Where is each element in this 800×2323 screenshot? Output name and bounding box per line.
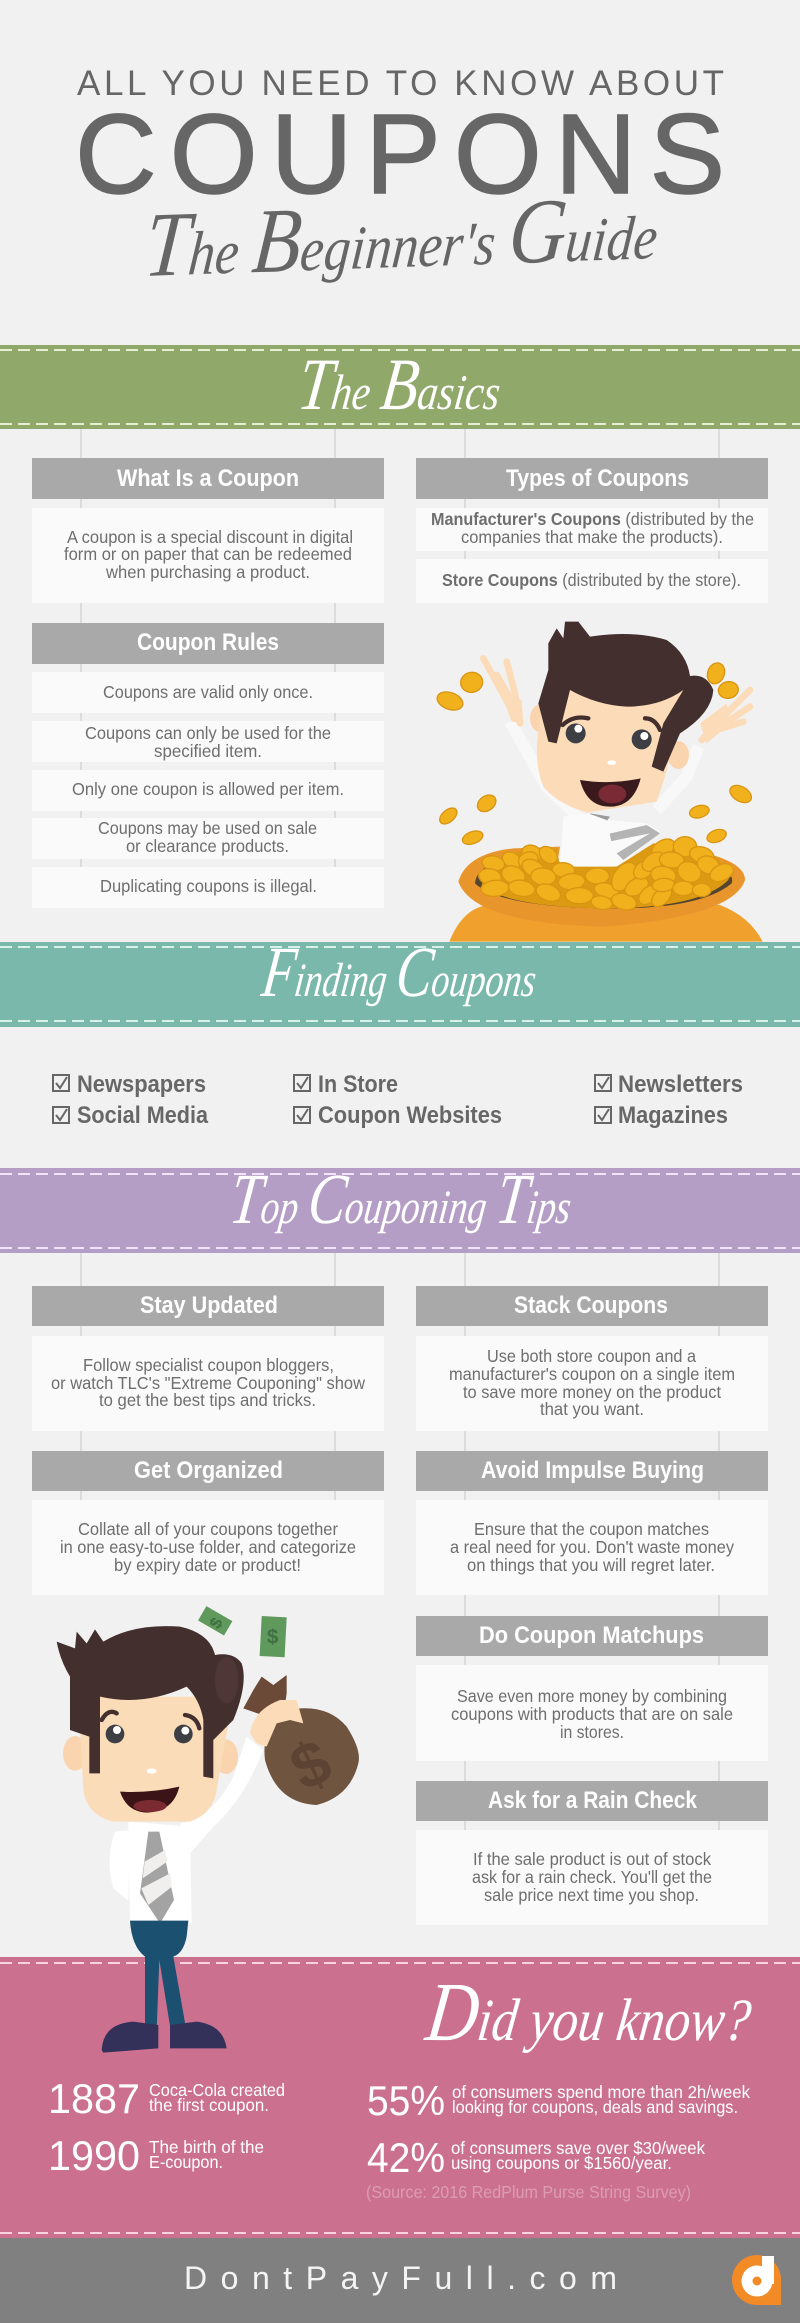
panel: get organized: Collate all of your coupons together	[78, 1519, 338, 1539]
panel: ask for a rain check: Ask for a Rain Check	[488, 1787, 698, 1814]
panel: do coupon matchups: in stores.	[560, 1722, 624, 1742]
stat: 55%: looking for coupons, deals and savings.	[452, 2097, 738, 2117]
panel: coupon rules: Coupons can only be used for the	[85, 723, 331, 743]
panel: coupon rules: or clearance products.	[126, 836, 289, 856]
source note: (Source: 2016 RedPlum Purse String Survey)	[366, 2182, 691, 2202]
panel: get organized	[32, 1451, 384, 1595]
stat: 1990: E-coupon.	[149, 2152, 223, 2172]
stat: 1990: 1990	[48, 2132, 140, 2179]
panel: get organized: in one easy-to-use folder, and categorize	[60, 1537, 356, 1557]
stat: 1887	[48, 2075, 285, 2122]
panel: types of coupons: Types of Coupons	[506, 465, 689, 492]
panel: ask for a rain check: If the sale product is out of stock	[473, 1849, 711, 1869]
banner: finding coupons: Finding Coupons	[257, 932, 542, 1012]
banner: top couponing tips: Top Couponing Tips	[226, 1159, 577, 1239]
panel: coupon rules: Coupons may be used on sale	[98, 818, 317, 838]
banner: the basics: The Basics	[294, 344, 506, 426]
panel: avoid impulse buying: Avoid Impulse Buying	[481, 1457, 704, 1484]
stat: 42%	[367, 2134, 705, 2181]
panel: stack coupons: Stack Coupons	[514, 1292, 668, 1319]
banner: top couponing tips	[0, 1159, 800, 1253]
panel: avoid impulse buying: a real need for you. Don't waste money	[450, 1537, 734, 1557]
panel: stack coupons: to save more money on the product	[463, 1382, 721, 1402]
icon: dontpayfull logo	[732, 2255, 781, 2305]
checklist: where to find coupons: Newspapers	[77, 1071, 206, 1098]
stat: 1990: The birth of the	[149, 2137, 264, 2157]
checklist: where to find coupons: Social Media	[77, 1102, 209, 1129]
illustration: man holding money bag: $	[280, 1726, 342, 1805]
panel: did you know	[0, 1957, 800, 2238]
checklist: where to find coupons	[53, 1071, 743, 1129]
title: The Beginner's Guide	[141, 176, 663, 296]
checklist: where to find coupons: Coupon Websites	[318, 1102, 502, 1129]
panel: stay updated: Follow specialist coupon bloggers,	[83, 1355, 334, 1375]
panel: stack coupons: manufacturer's coupon on a single item	[449, 1364, 735, 1384]
footer: DontPayFull.com	[184, 2260, 617, 2296]
panel: avoid impulse buying	[416, 1451, 768, 1595]
panel: stay updated: or watch TLC's "Extreme Couponing" show	[51, 1373, 365, 1393]
stat: 42%: 42%	[367, 2134, 445, 2181]
panel: types of coupons: Manufacturer's Coupons (distributed by the	[431, 509, 754, 529]
panel: get organized: Get Organized	[134, 1457, 283, 1484]
panel: what is a coupon: form or on paper that can be redeemed	[64, 544, 352, 564]
panel: stack coupons	[416, 1286, 768, 1431]
panel: do coupon matchups: Save even more money by combining	[457, 1686, 727, 1706]
panel: coupon rules	[32, 623, 384, 908]
title	[75, 64, 725, 296]
panel: coupon rules: Coupon Rules	[137, 629, 279, 656]
panel: get organized: by expiry date or product!	[114, 1555, 301, 1575]
panel: what is a coupon: when purchasing a product.	[105, 562, 310, 582]
checklist: where to find coupons: Newsletters	[618, 1071, 743, 1098]
panel: stack coupons: that you want.	[540, 1399, 644, 1419]
panel: types of coupons	[416, 458, 768, 603]
stat: 42%: of consumers save over $30/week	[451, 2138, 705, 2158]
checklist: where to find coupons: Magazines	[618, 1102, 728, 1129]
illustration: man holding money bag: $	[206, 1614, 227, 1632]
panel: do coupon matchups: coupons with products that are on sale	[451, 1704, 733, 1724]
illustration: man holding money bag: $	[267, 1625, 279, 1648]
stat: 55%: of consumers spend more than 2h/week	[452, 2082, 750, 2102]
stat: 42%: using coupons or $1560/year.	[451, 2153, 672, 2173]
footer	[0, 2238, 800, 2323]
panel: what is a coupon: What Is a Coupon	[117, 465, 299, 492]
banner: the basics	[0, 344, 800, 429]
panel: avoid impulse buying: Ensure that the coupon matches	[474, 1519, 709, 1539]
illustration: happy man in pot of gold coins	[435, 622, 763, 942]
panel: types of coupons: Store Coupons (distributed by the store).	[442, 570, 741, 590]
banner: finding coupons	[0, 932, 800, 1027]
illustration: man holding money bag	[57, 1606, 359, 2053]
panel: do coupon matchups	[416, 1616, 768, 1761]
title: ALL YOU NEED TO KNOW ABOUT	[77, 64, 724, 103]
panel: ask for a rain check	[416, 1781, 768, 1925]
panel: types of coupons: companies that make the products).	[461, 527, 723, 547]
panel: avoid impulse buying: on things that you will regret later.	[467, 1555, 715, 1575]
stat: 1990	[48, 2132, 264, 2179]
panel: what is a coupon: A coupon is a special discount in digital	[67, 527, 353, 547]
stat: 1887: Coca-Cola created	[149, 2080, 285, 2100]
checklist: where to find coupons: In Store	[318, 1071, 398, 1098]
heading: did you know: Did you know?	[421, 1966, 757, 2059]
panel: coupon rules: Coupons are valid only once.	[103, 682, 313, 702]
panel: stay updated: Stay Updated	[140, 1292, 278, 1319]
stat: 1887: the first coupon.	[149, 2095, 269, 2115]
panel: stack coupons: Use both store coupon and a	[487, 1346, 696, 1366]
panel: ask for a rain check: sale price next time you shop.	[484, 1885, 699, 1905]
panel: do coupon matchups: Do Coupon Matchups	[479, 1622, 704, 1649]
panel: ask for a rain check: ask for a rain check. You'll get the	[472, 1867, 712, 1887]
stat: 55%	[367, 2077, 750, 2124]
stat: 55%: 55%	[367, 2077, 445, 2124]
panel: stay updated	[32, 1286, 384, 1431]
panel: what is a coupon	[32, 458, 384, 603]
stat: 1887: 1887	[48, 2075, 140, 2122]
panel: coupon rules: Duplicating coupons is illegal.	[100, 876, 317, 896]
panel: coupon rules: specified item.	[154, 741, 262, 761]
panel: coupon rules: Only one coupon is allowed per item.	[72, 779, 344, 799]
title: COUPONS	[75, 91, 725, 217]
panel: stay updated: to get the best tips and tricks.	[99, 1390, 316, 1410]
